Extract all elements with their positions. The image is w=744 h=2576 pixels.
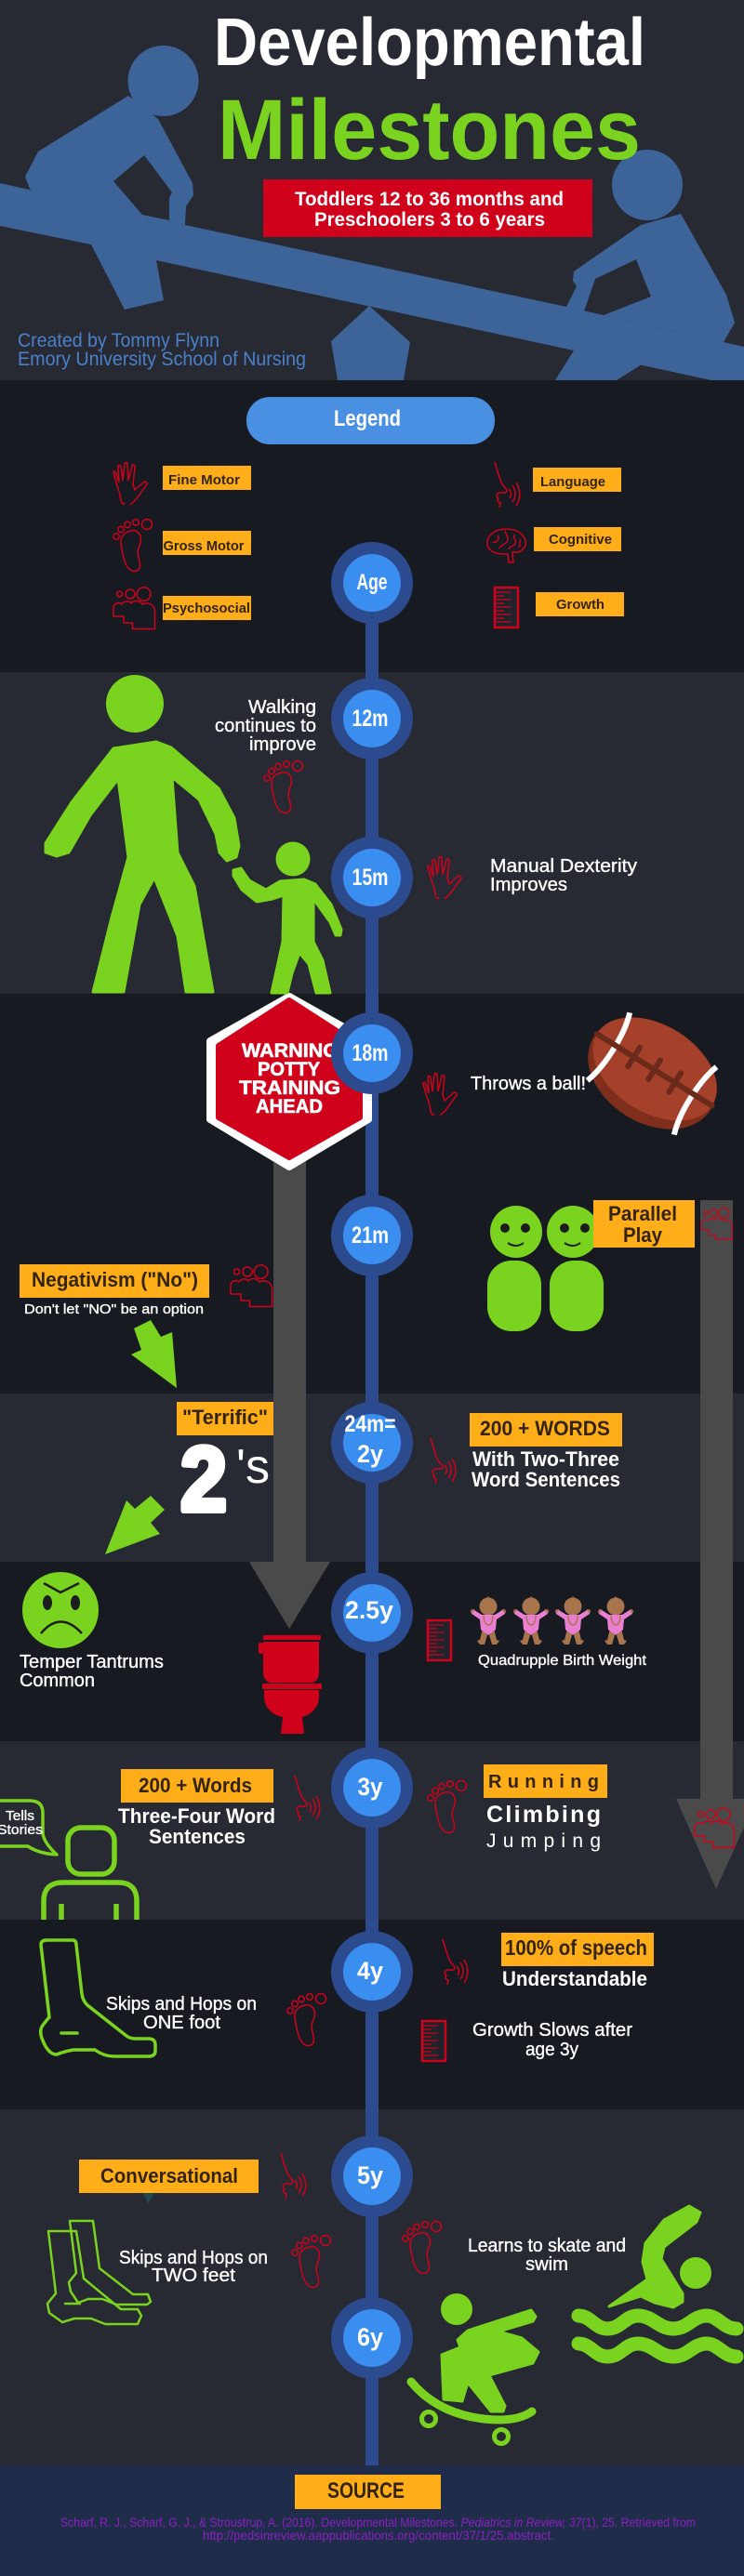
age marker: 12m: 12m (352, 706, 389, 732)
label: 100 percent of speech: 100% of speech (505, 1935, 647, 1960)
legend: gross motor (113, 519, 251, 572)
text: skips and hops on one foot (106, 1994, 257, 2033)
text: growth slows (472, 2020, 632, 2060)
age marker: 3y: 3y (357, 1773, 383, 1801)
text: with two-three word sentences: Word Sentences (472, 1468, 620, 1491)
label: parallel play (593, 1200, 695, 1248)
label: 200 words: 200 + WORDS (480, 1417, 610, 1440)
legend: language: Language (540, 474, 605, 490)
title: Developmental (214, 6, 645, 80)
label: terrific: "Terrific" (182, 1406, 268, 1429)
text: manual dexterity improves: Manual Dexterity (490, 856, 637, 877)
source heading: SOURCE (327, 2478, 405, 2503)
icon: toilet (259, 1635, 322, 1734)
text: big 2's (180, 1428, 270, 1530)
icon: hand at 15m (428, 857, 461, 899)
label: parallel play: Play (623, 1223, 663, 1247)
panel: 4 year band (0, 1920, 744, 2109)
legend: fine motor: Fine Motor (168, 472, 240, 488)
citation: Scharf, R. J., Scharf, G. J., & Stroustrup, A. (2016). Developmental Milestones. Pediatrics in Review, 37(1), 25. Retrieved from (60, 2515, 696, 2530)
legend: cognitive: Cognitive (549, 532, 612, 548)
legend: gross motor: Gross Motor (164, 538, 245, 554)
panel: 18 to 21 month band (0, 994, 744, 1394)
citation: http://pedsinreview.aappublications.org/content/37/1/25.abstract. (203, 2528, 554, 2543)
text: with two-three word sentences (472, 1447, 620, 1491)
age marker: 4y (331, 1931, 413, 2013)
label: negativism: Negativism ("No") (32, 1268, 198, 1291)
label: 200 words at 3y: 200 + Words (139, 1774, 252, 1797)
panel: 3 year band (0, 1741, 744, 1920)
potty warning sign: TRAINING (239, 1077, 340, 1099)
text: don't let no be an option: Don't let "NO" be an option (24, 1301, 204, 1317)
icon: ruler at 2.5y (428, 1620, 451, 1660)
icon: nose at 24m (431, 1438, 456, 1484)
legend: language (495, 462, 621, 508)
text: three-four word sentences: Sentences (149, 1825, 246, 1848)
legend heading: Legend (334, 406, 401, 431)
label: running (484, 1764, 607, 1798)
age marker: 5y (331, 2135, 413, 2217)
text: temper tantrums common: Temper Tantrums (20, 1652, 164, 1672)
icon: nose at 3y (295, 1776, 320, 1821)
icon: foot at 12m (264, 760, 303, 813)
legend: psychosocial: Psychosocial (163, 601, 250, 616)
panel: 5 to 6 year band (0, 2109, 744, 2465)
text: manual dexterity improves (490, 856, 637, 895)
panel: header background (0, 0, 744, 380)
age marker: 15m: 15m (352, 865, 389, 891)
age marker: 21m: 21m (352, 1222, 389, 1248)
potty warning sign: POTTY (258, 1059, 320, 1080)
author credit: Created by Tommy Flynn (18, 330, 219, 351)
text: climbing: Climbing (486, 1802, 601, 1828)
legend heading (246, 397, 495, 444)
text: learns to skate and swim: swim (525, 2254, 568, 2275)
label: conversational (79, 2160, 259, 2203)
grey arrow: parallel play (676, 1200, 744, 1889)
age marker: 2.5y (331, 1572, 413, 1654)
icon: foot right at 5y (403, 2222, 441, 2274)
icon: ruler at 4y (422, 2021, 445, 2061)
citation (60, 2515, 696, 2543)
grey arrow: potty training (249, 1153, 330, 1629)
legend: psychosocial (113, 588, 251, 628)
text: temper tantrums common: Common (20, 1671, 95, 1691)
icon: nose at 4y (443, 1939, 468, 1985)
text: skips and hops on two feet: Skips and Hops on (119, 2248, 268, 2268)
label: 200 words at 3y (121, 1769, 273, 1803)
legend: fine motor (113, 463, 251, 505)
icon: four babies (471, 1596, 633, 1645)
text: skips and hops on two feet (119, 2248, 268, 2286)
legend: growth: Growth (556, 597, 604, 613)
subtitle box: Toddlers 12 to 36 months and (295, 189, 564, 210)
icon: psychosocial on arrowhead (695, 1808, 735, 1848)
text: walking continues to improve: improve (249, 734, 316, 755)
legend: cognitive (487, 527, 621, 562)
text: big 2's: 2 (180, 1428, 227, 1530)
text: skips and hops on one foot: ONE foot (143, 2013, 220, 2033)
author credit: Emory University School of Nursing (18, 349, 306, 370)
legend: growth (495, 588, 624, 627)
panel: 12 to 15 month band (0, 672, 744, 994)
icon: nose at 5y (281, 2153, 306, 2199)
age marker: 6y: 6y (357, 2323, 383, 2351)
text: walking continues to improve: continues to (215, 716, 316, 736)
text: walking continues to improve: Walking (248, 697, 316, 718)
age marker: 18m: 18m (352, 1040, 389, 1066)
age marker: Age: Age (357, 570, 387, 595)
icon: psychosocial on arrow (701, 1208, 733, 1239)
text: three-four word sentences (118, 1804, 275, 1848)
author credit (18, 330, 306, 370)
icon: psychosocial at negativism (231, 1265, 272, 1307)
age marker: 21m (331, 1195, 413, 1276)
arrow: down to temper tantrums (105, 1496, 165, 1554)
label: terrific (177, 1402, 273, 1435)
label: 100 percent of speech (501, 1933, 654, 1966)
arrow: down to terrific twos (131, 1320, 177, 1388)
icon: foot left at 5y (292, 2235, 331, 2288)
potty warning sign (210, 997, 368, 1167)
potty warning sign: AHEAD (256, 1096, 323, 1117)
icon: person outline (44, 1828, 137, 1920)
label: parallel play: Parallel (608, 1202, 677, 1225)
subtitle box: Preschoolers 3 to 6 years (314, 209, 545, 231)
age marker: 24m equals 2y (331, 1402, 413, 1484)
icon: football (567, 996, 737, 1152)
title: Milestones (218, 83, 641, 178)
panel: 24 month band (0, 1394, 744, 1562)
text: growth slows: Growth Slows after (472, 2020, 632, 2041)
text: jumping: Jumping (486, 1830, 601, 1852)
age marker: 24m equals 2y: 24m= (344, 1411, 396, 1437)
text: growth slows: age 3y (525, 2040, 578, 2060)
timeline line (365, 583, 379, 2465)
text: with two-three word sentences: With Two-Three (472, 1447, 619, 1471)
text: learns to skate and swim: Learns to skate and (468, 2236, 626, 2256)
title (214, 6, 645, 178)
icon: two smiling figures (487, 1206, 604, 1331)
age marker: 3y (331, 1747, 413, 1829)
child figure (233, 842, 341, 993)
speech bubble: tells stories: Tells (6, 1808, 34, 1824)
icon: skateboarder (411, 2293, 538, 2443)
age marker: 4y: 4y (357, 1957, 383, 1985)
adult figure (46, 675, 239, 992)
text: temper tantrums common (20, 1652, 164, 1691)
illustration: seesaw with two figures (0, 46, 744, 380)
panel: footer band (0, 2465, 744, 2576)
speech bubble: tells stories (0, 1801, 57, 1855)
text: understandable: Understandable (502, 1967, 647, 1990)
panel: legend band (0, 380, 744, 672)
text: skips and hops on two feet: TWO feet (152, 2266, 235, 2286)
age marker: 2.5y: 2.5y (345, 1596, 393, 1624)
age marker: 15m (331, 837, 413, 918)
label: conversational: Conversational (100, 2164, 238, 2187)
icon: swimmer (578, 2206, 737, 2357)
icon: hand at 18m (423, 1073, 457, 1116)
icon: angry face (22, 1572, 99, 1648)
age marker: 6y (331, 2297, 413, 2379)
icon: foot outline (41, 1940, 155, 2056)
subtitle box (263, 179, 592, 237)
text: manual dexterity improves: Improves (490, 875, 567, 895)
age marker: 18m (331, 1012, 413, 1094)
age marker: 12m (331, 678, 413, 760)
icon: foot at 4y (287, 1993, 326, 2046)
text: big 2's: 's (236, 1440, 270, 1494)
text: skips and hops on one foot: Skips and Hops on (106, 1994, 257, 2015)
label: running: Running (488, 1772, 599, 1792)
text: throws a ball: Throws a ball! (471, 1074, 586, 1094)
icon: two foot outlines (47, 2221, 151, 2324)
label: negativism (20, 1264, 209, 1298)
panel: 2.5 year band (0, 1562, 744, 1741)
potty warning sign: WARNING (242, 1040, 339, 1062)
label: 200 words (470, 1413, 622, 1447)
text: walking continues to improve (215, 697, 316, 755)
icon: foot at 3y (428, 1781, 467, 1833)
text: learns to skate and swim (468, 2236, 626, 2275)
text: three-four word sentences: Three-Four Word (118, 1804, 275, 1828)
age marker: 5y: 5y (357, 2161, 383, 2189)
age marker: Age (331, 542, 413, 624)
source heading (295, 2475, 441, 2509)
age marker: 24m equals 2y: 2y (357, 1440, 383, 1468)
text: quadruple birth weight: Quadrupple Birth Weight (478, 1653, 647, 1669)
